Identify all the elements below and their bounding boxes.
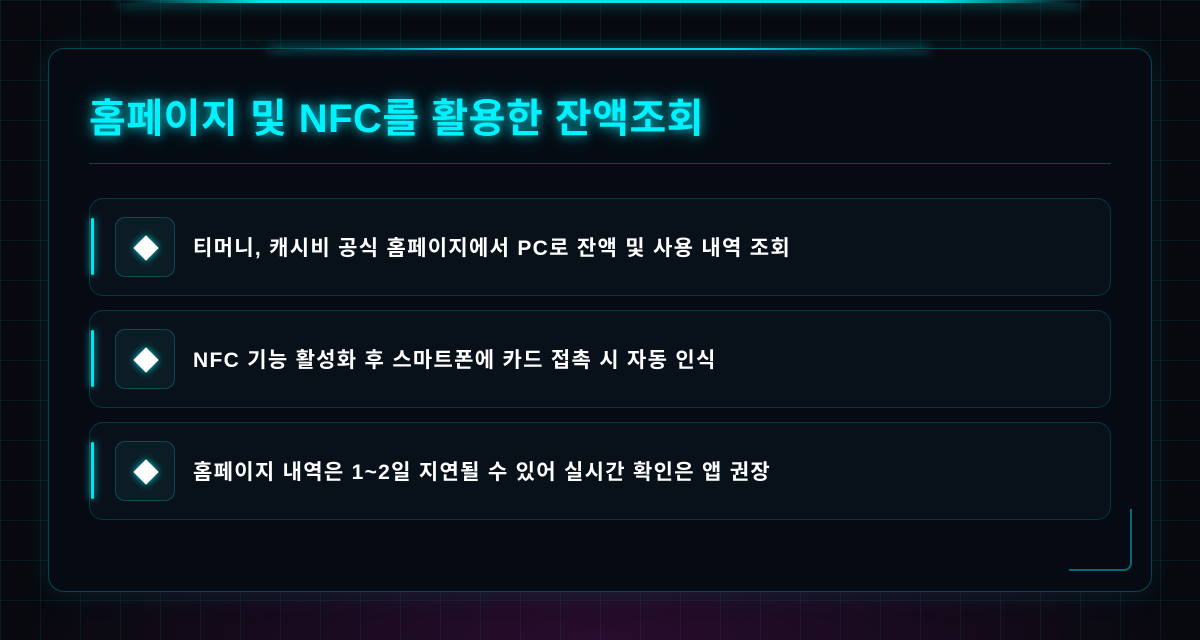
icon: diamond: [115, 329, 175, 389]
text 1: 티머니, 캐시비 공식 홈페이지에서 PC로 잔액 및 사용 내역 조회: [193, 237, 791, 260]
item 2: [89, 310, 1111, 408]
corner bracket: [1069, 509, 1132, 571]
icon: diamond: [115, 441, 175, 501]
text 2: NFC 기능 활성화 후 스마트폰에 카드 접촉 시 자동 인식: [193, 349, 717, 372]
text 3: 홈페이지 내역은 1~2일 지연될 수 있어 실시간 확인은 앱 권장: [193, 461, 771, 484]
icon: diamond: [115, 217, 175, 277]
item 3: [89, 422, 1111, 520]
item 1: [89, 198, 1111, 296]
panel: main card: [48, 48, 1152, 592]
title: 홈페이지 및 NFC를 활용한 잔액조회: [89, 97, 704, 141]
